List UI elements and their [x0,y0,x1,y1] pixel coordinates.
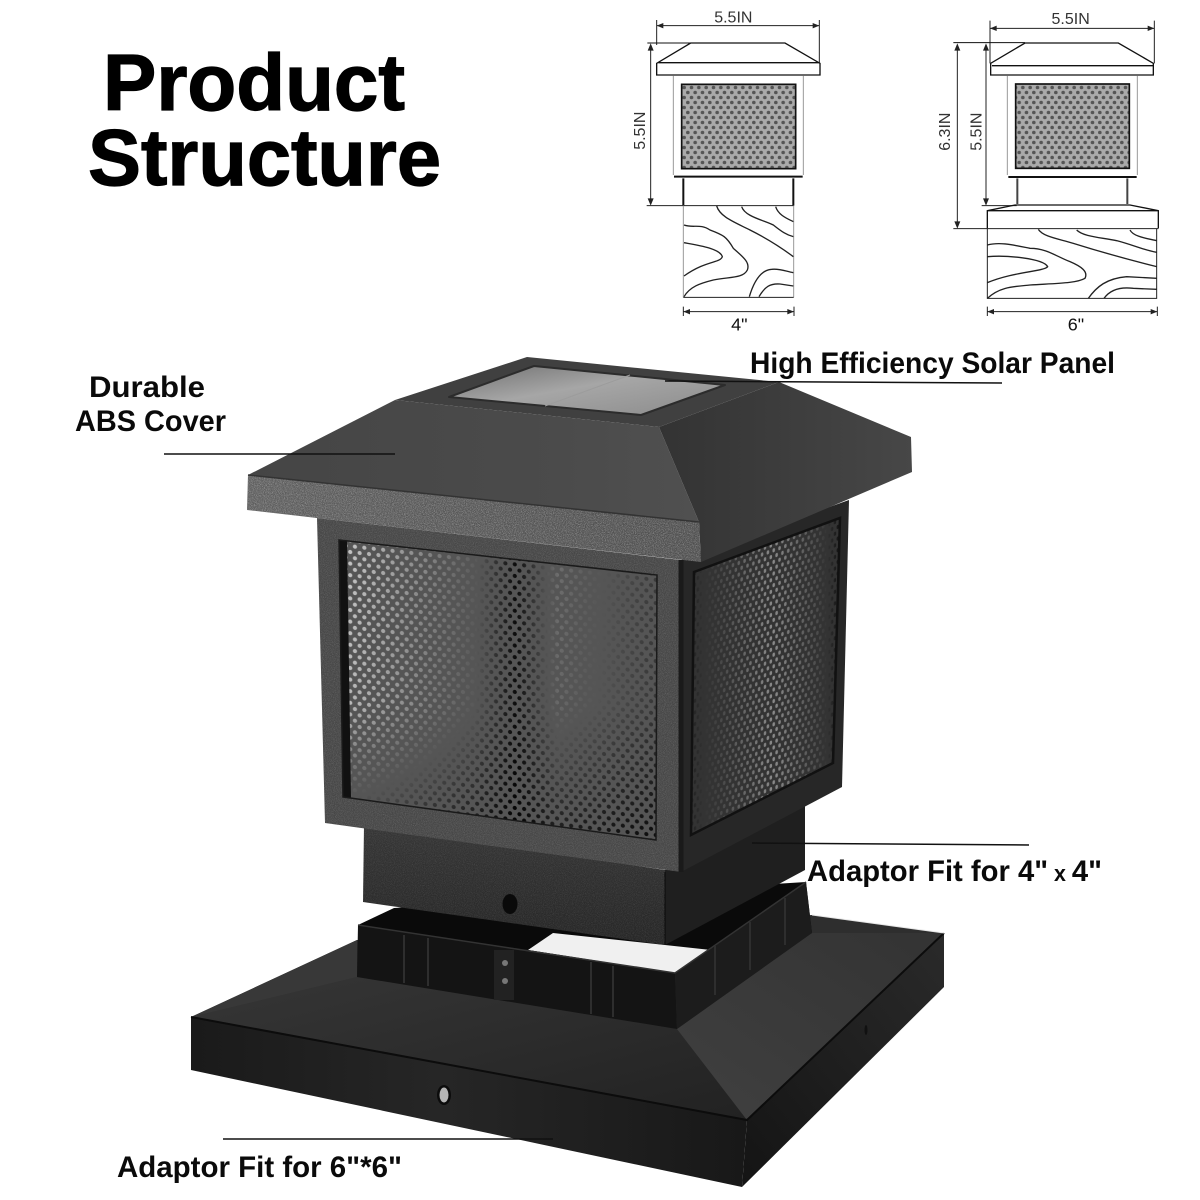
title: Structure [88,113,441,202]
height labels: 6.3IN [937,113,954,151]
diagram: 6 inch post dimensions [937,11,1158,335]
width label 5.5IN: 5.5IN [714,10,752,27]
label: adaptor fit for 4x4: Adaptor Fit for 4" x 4" [807,855,1102,888]
base screw hole [437,1085,451,1105]
front mesh panel [339,540,657,840]
height labels: 5.5IN [969,113,986,151]
height label 5.5IN: 5.5IN [632,112,649,150]
diagram: 4 inch post dimensions [632,10,820,335]
width label 4 inch: 4" [731,315,748,335]
width label 6 inch: 6" [1068,315,1084,335]
product: solar post cap lamp [191,357,944,1187]
roof cap outline [657,43,820,75]
perforated mesh panel [1016,84,1129,168]
side frame [681,500,849,872]
title [88,38,441,202]
roof cap outline [991,43,1153,75]
wood post [987,229,1157,298]
label: durable ABS cover: Durable [89,371,205,404]
lantern body [317,500,849,872]
label: adaptor fit for 6x6: Adaptor Fit for 6"*6" [117,1151,402,1184]
title: Product [103,38,405,127]
side mesh panel [691,518,840,835]
6x6 base plate [191,915,944,1187]
ABS cover [247,357,912,562]
base collar [987,205,1158,228]
mounting ring [357,882,812,1029]
height labels [937,113,986,151]
width label 5.5IN: 5.5IN [1052,11,1090,28]
label: durable ABS cover: ABS Cover [75,405,226,438]
perforated mesh panel [682,84,796,169]
solar panel [449,366,725,415]
label: high efficiency solar panel: High Efficiency Solar Panel [750,347,1115,380]
label: durable ABS cover [75,371,395,454]
neck screw hole [502,894,518,914]
wood post [683,206,794,297]
neck adaptor 4x4 [363,800,805,945]
front frame [317,518,681,872]
